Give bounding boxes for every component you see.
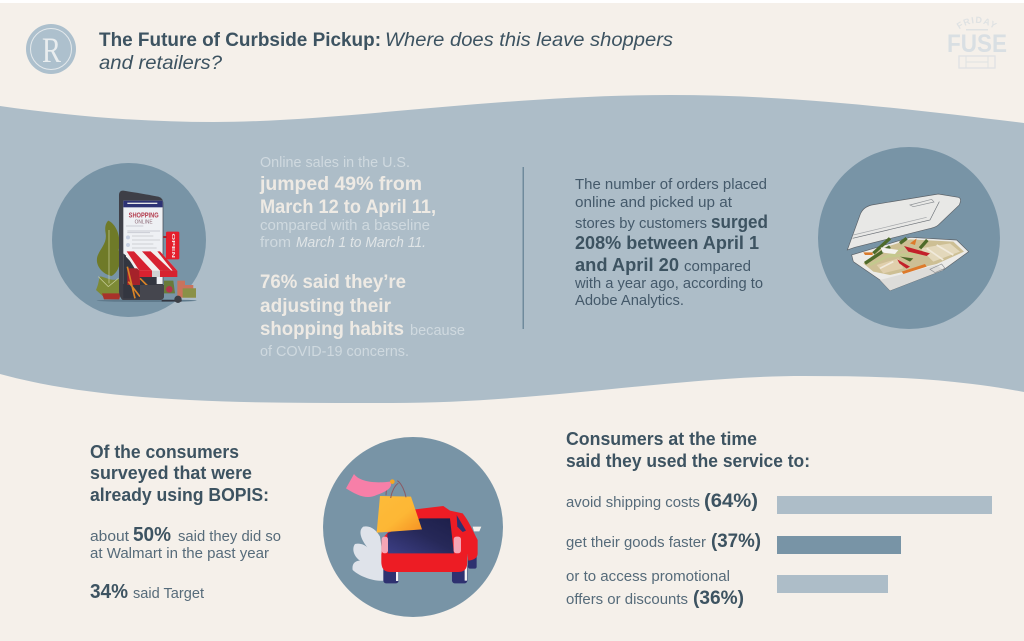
illustration: smartphone storefront bbox=[52, 163, 206, 317]
text block: orders surged: Adobe Analytics. bbox=[575, 293, 684, 309]
box base bbox=[852, 237, 969, 291]
stat: Walmart 50%: at Walmart in the past year bbox=[90, 546, 269, 562]
text block: orders surged: stores by customers bbox=[575, 216, 707, 232]
stat: Walmart 50%: said they did so bbox=[178, 529, 281, 545]
car body bbox=[382, 506, 478, 561]
wheels bbox=[383, 563, 399, 583]
storefront bbox=[123, 253, 157, 298]
text block: online sales: shopping habits bbox=[260, 319, 404, 340]
icon: R logo: R bbox=[42, 30, 61, 70]
trunk opening bbox=[387, 518, 454, 554]
icon: R logo bbox=[26, 24, 76, 74]
text block: orders surged: with a year ago, according to bbox=[574, 276, 763, 292]
open sign bbox=[166, 232, 179, 259]
panel: wavy blue band bbox=[0, 95, 1024, 403]
illustration: takeout food box bbox=[818, 147, 1000, 329]
title: The Future of Curbside Pickup: bbox=[99, 30, 381, 51]
text block: BOPIS consumers bbox=[90, 442, 281, 603]
heading: Of the consumers bbox=[90, 442, 239, 462]
text block: online sales: adjusting their bbox=[260, 296, 392, 317]
stat: Walmart 50%: about bbox=[90, 529, 129, 545]
stat: Target 34%: said Target bbox=[133, 586, 204, 602]
taillights bbox=[382, 537, 388, 553]
text block: orders surged: 208% between April 1 bbox=[575, 233, 759, 253]
heading: already using BOPIS: bbox=[90, 485, 269, 505]
text block: online sales: March 1 to March 11. bbox=[296, 235, 426, 251]
illustration: car with shopping bag bbox=[323, 437, 503, 617]
text block: orders surged: surged bbox=[711, 212, 768, 232]
row: get goods faster bbox=[566, 531, 901, 554]
heading: surveyed that were bbox=[90, 463, 252, 483]
text block: online sales: from bbox=[260, 235, 291, 251]
row: avoid shipping costs bbox=[566, 491, 992, 514]
mirror bbox=[473, 527, 481, 531]
awning bbox=[126, 251, 177, 271]
illustration: smartphone storefront: SHOPPING bbox=[129, 212, 159, 219]
text block: orders surged: compared bbox=[684, 259, 751, 275]
stat: Walmart 50%: 50% bbox=[133, 524, 171, 546]
text block: orders surged: and April 20 bbox=[575, 255, 679, 275]
row: promotional offers: or to access promotional bbox=[566, 569, 730, 585]
title: Where does this leave shoppers bbox=[385, 30, 674, 51]
icon: Friday Fuse logo: FUSE bbox=[947, 30, 1007, 58]
food bbox=[863, 239, 964, 275]
row: avoid shipping costs: (64%) bbox=[704, 491, 758, 512]
plant bbox=[97, 299, 197, 302]
header bbox=[26, 16, 1007, 74]
row: avoid shipping costs: avoid shipping costs bbox=[566, 495, 700, 511]
row: promotional offers: offers or discounts bbox=[566, 592, 688, 608]
row: promotional offers bbox=[566, 569, 888, 609]
plant leaf bbox=[352, 526, 387, 581]
phone bbox=[119, 191, 163, 300]
heading bbox=[566, 429, 810, 471]
heading: said they used the service to: bbox=[566, 451, 810, 471]
bumper bbox=[381, 553, 467, 572]
row: promotional offers: (36%) bbox=[693, 588, 744, 609]
stat: Target 34% bbox=[90, 581, 204, 603]
text block: online sales: because bbox=[410, 323, 465, 339]
text block: online sales: compared with a baseline bbox=[260, 218, 430, 234]
cart bbox=[164, 281, 175, 293]
stat: Target 34%: 34% bbox=[90, 581, 128, 603]
text block: online sales bbox=[259, 155, 465, 360]
heading bbox=[90, 442, 269, 505]
text block: online sales: 76% said they’re bbox=[260, 272, 406, 293]
box lid bbox=[847, 194, 961, 250]
row: get goods faster: (37%) bbox=[711, 531, 761, 552]
text block: orders surged: online and picked up at bbox=[575, 195, 732, 211]
ribbon bbox=[346, 474, 391, 497]
icon: Friday Fuse logo: FRIDAY bbox=[956, 16, 997, 29]
shopping bag bbox=[377, 496, 422, 533]
heading: Consumers at the time bbox=[566, 429, 757, 449]
row: get goods faster: get their goods faster bbox=[566, 535, 706, 551]
text block: online sales: Online sales in the U.S. bbox=[260, 155, 410, 171]
illustration: smartphone storefront: OPEN bbox=[170, 233, 176, 259]
title: and retailers? bbox=[99, 53, 222, 74]
text block: online sales: March 12 to April 11, bbox=[260, 197, 436, 218]
title bbox=[99, 30, 674, 74]
text block: online sales: of COVID-19 concerns. bbox=[260, 344, 409, 360]
icon: Friday Fuse logo bbox=[947, 16, 1007, 68]
bar chart: service uses bbox=[566, 429, 992, 609]
text block: orders surged bbox=[574, 177, 768, 309]
stat: Walmart 50% bbox=[90, 524, 281, 562]
text block: orders surged: The number of orders placed bbox=[575, 177, 767, 193]
illustration: smartphone storefront: ONLINE bbox=[135, 220, 153, 226]
text block: online sales: jumped 49% from bbox=[259, 174, 422, 195]
